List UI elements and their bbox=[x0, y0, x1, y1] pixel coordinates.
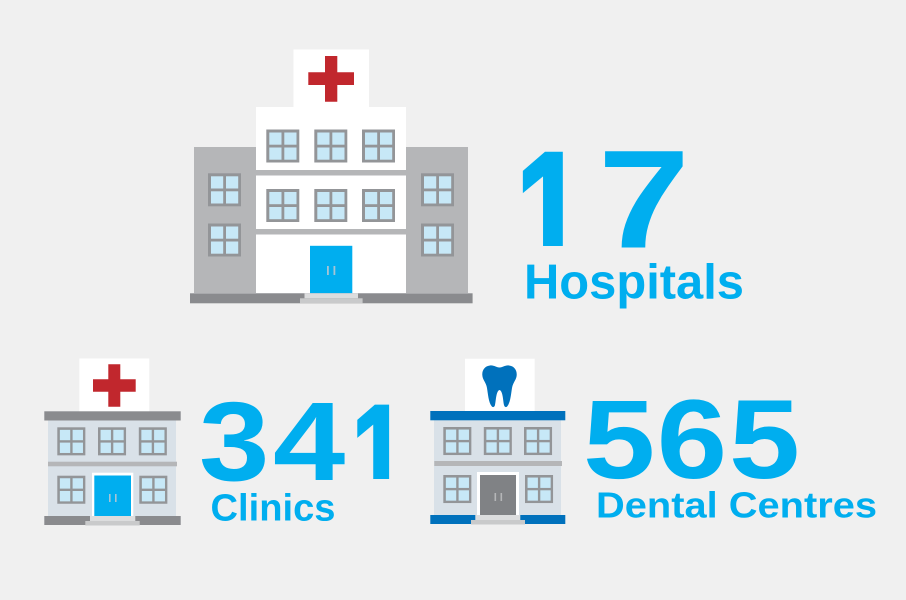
roof bbox=[430, 411, 565, 420]
windows bbox=[57, 427, 167, 504]
base bbox=[430, 515, 565, 524]
icon: tooth bbox=[482, 365, 517, 407]
number: 565: 5 bbox=[729, 377, 800, 502]
number: 565 bbox=[583, 376, 800, 502]
body bbox=[48, 420, 176, 516]
rooftop sign bbox=[465, 359, 535, 411]
label: Hospitals: Hospitals bbox=[524, 256, 744, 310]
main block bbox=[256, 107, 406, 293]
number: 17 bbox=[522, 151, 683, 248]
door bbox=[310, 246, 352, 293]
windows bbox=[443, 427, 553, 503]
label: Clinics: Clinics bbox=[210, 488, 336, 530]
left wing bbox=[194, 147, 256, 293]
roof bbox=[44, 411, 181, 420]
number: 341: 3 bbox=[199, 380, 269, 504]
rooftop sign bbox=[294, 50, 369, 108]
number: 17: 7 bbox=[598, 121, 690, 278]
icon: red cross bbox=[308, 56, 354, 102]
floor band bbox=[48, 462, 177, 466]
icon: clinic building bbox=[44, 358, 181, 526]
icon: red cross bbox=[93, 364, 136, 407]
base bbox=[190, 293, 473, 303]
floor band bbox=[434, 461, 562, 466]
number: 565: 5 bbox=[583, 376, 655, 502]
lower centre windows bbox=[266, 189, 395, 222]
number: 341: 4 bbox=[273, 378, 345, 504]
base bbox=[44, 516, 181, 526]
floor band upper bbox=[256, 170, 406, 176]
number: 341 bbox=[202, 402, 390, 482]
body bbox=[434, 420, 561, 515]
floor band lower bbox=[256, 229, 406, 234]
door bbox=[477, 472, 519, 515]
label: Dental Centres: Dental Centres bbox=[596, 485, 877, 526]
number: 17: 1 bbox=[516, 119, 584, 301]
door bbox=[92, 473, 133, 516]
wing windows bbox=[208, 173, 454, 256]
upper centre windows bbox=[266, 130, 395, 162]
icon: dental centre building bbox=[430, 359, 565, 524]
number: 565: 6 bbox=[657, 378, 727, 502]
rooftop sign bbox=[79, 358, 149, 412]
icon: hospital building bbox=[190, 50, 473, 303]
right wing bbox=[406, 147, 468, 293]
number: 341: 1 bbox=[352, 380, 406, 523]
